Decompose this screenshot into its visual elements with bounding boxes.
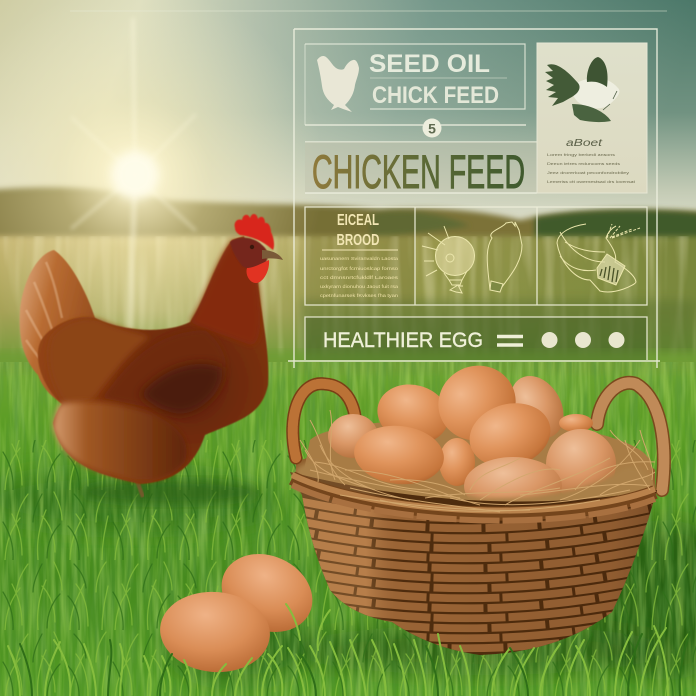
body text <box>320 256 399 298</box>
icon: light bulb <box>422 226 474 293</box>
hen: wattle <box>246 260 269 283</box>
label: healthier egg: HEALTHIER EGG <box>323 329 483 352</box>
basket: woven body <box>290 472 657 655</box>
heading: seed oil: SEED OIL <box>369 50 490 78</box>
rating dots <box>542 332 624 348</box>
card body text: Jeez drorerkoat peconfondrobiley <box>547 171 629 175</box>
basket: left handle <box>293 384 355 458</box>
hen: neck <box>190 240 260 345</box>
hen: wing <box>102 330 226 410</box>
panel: ethical brood: BROOD <box>336 232 380 249</box>
panel: ethical brood <box>305 207 647 305</box>
basket of eggs <box>280 353 670 665</box>
hen: tail feathers <box>26 262 62 372</box>
hen: shadow on grass <box>80 480 260 504</box>
step number rule <box>305 118 537 142</box>
panel: chicken feed headline: CHICKEN FEED <box>312 145 525 198</box>
panel: about card <box>537 43 647 193</box>
panel: chicken feed headline <box>305 142 537 198</box>
hen: leg <box>136 478 143 497</box>
basket: straw bed <box>302 420 654 508</box>
infographic overlay <box>70 11 667 368</box>
heading: chick feed: CHICK FEED <box>372 82 499 109</box>
card body text <box>547 153 636 184</box>
hen: rear wing <box>48 319 148 403</box>
icon: bottle <box>487 222 522 292</box>
grass blades in front <box>8 604 690 696</box>
grass foreground <box>0 352 696 696</box>
body text: uasunanern Sviranvaldn Laosta <box>320 256 399 261</box>
card heading: aBoet <box>566 138 604 149</box>
hen: head <box>230 238 268 269</box>
heading: eiceal brood: EICEAL <box>337 212 379 229</box>
hen: tail <box>20 250 140 404</box>
hen <box>20 214 283 504</box>
body text: cct dmnsnrtcfukldlf Laroaes <box>320 275 398 280</box>
basket: back rim <box>296 443 655 500</box>
hen: body <box>38 236 268 484</box>
background: sunlit meadow <box>0 0 696 371</box>
icon: flying bird <box>545 57 619 122</box>
body text: cpetnfunarsek fKvkses fha tyan <box>320 293 399 298</box>
basket: right handle <box>597 383 664 490</box>
card body text: Lorem fringy berkedi ansons <box>547 153 615 157</box>
icon: bird with tag <box>557 224 640 292</box>
egg: front <box>157 587 273 677</box>
icon: equals <box>497 336 523 345</box>
hen: eye <box>250 245 254 249</box>
eggs <box>328 353 616 515</box>
body text: uxkyrarn dionuhou Jaout fuit rsa <box>320 284 399 289</box>
step number rule: 5 <box>428 120 436 136</box>
body text: unrctorgfot fcrniuoslcap fornso <box>320 266 399 271</box>
outer frame <box>288 29 660 368</box>
hen: comb <box>235 214 274 250</box>
icon: hen silhouette <box>317 56 359 112</box>
hen: beak <box>262 250 283 260</box>
eggs on the grass <box>157 540 325 677</box>
panel: seed oil header <box>305 44 525 125</box>
hen: belly fluff <box>53 402 187 481</box>
card body text: Lemeriss ctt owernestsad drs lovensat <box>547 180 636 184</box>
basket: rim <box>292 478 655 514</box>
panel: healthier egg bar <box>305 317 647 360</box>
card body text: Deeun ietres reduncoms seeds <box>547 162 620 166</box>
decorative top rule <box>70 10 667 12</box>
basket: straw over eggs <box>296 462 655 520</box>
egg: rear <box>209 540 325 646</box>
basket: straw strands <box>300 410 655 512</box>
